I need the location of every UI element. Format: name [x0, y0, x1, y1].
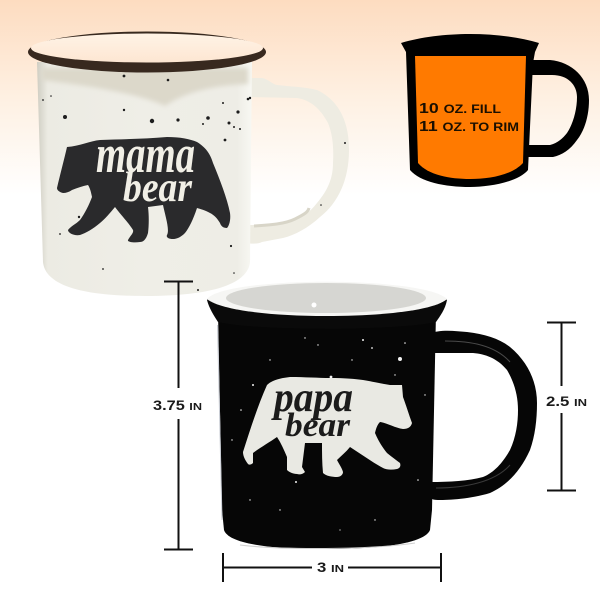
label 2.5 in: 2.5 IN — [546, 394, 587, 409]
white bear silhouette — [243, 377, 412, 477]
mug body — [218, 312, 436, 549]
black bear silhouette — [57, 137, 230, 242]
dimension: height 2.5 in — [546, 322, 587, 490]
white mama bear mug — [28, 32, 349, 296]
background gradient — [0, 0, 600, 195]
papa bear lettering: papa — [271, 375, 353, 421]
mama bear lettering: mama — [96, 124, 195, 184]
papa bear lettering — [271, 375, 353, 444]
body top shadow — [41, 68, 248, 106]
capacity mug icon — [401, 34, 589, 187]
speckles — [231, 337, 426, 531]
icon mug body — [401, 34, 539, 187]
dimension: height 3.75 in — [153, 281, 202, 550]
black papa bear mug — [207, 282, 537, 549]
icon handle — [525, 60, 589, 157]
mug handle — [426, 331, 537, 500]
capacity text: 10 OZ. FILL — [419, 100, 501, 117]
icon orange fill — [415, 56, 526, 179]
mug body — [37, 62, 252, 296]
dimension: width 3 in — [223, 553, 441, 582]
mug rim — [207, 284, 447, 329]
capacity text: 11 OZ. TO RIM — [419, 118, 519, 135]
label 3 in: 3 IN — [317, 560, 344, 575]
mug handle — [246, 78, 349, 244]
mama bear lettering: bear — [123, 165, 193, 211]
mama bear lettering — [96, 124, 195, 211]
mug rim — [28, 32, 266, 72]
label 3.75 in: 3.75 IN — [153, 398, 202, 413]
speckles — [42, 75, 346, 291]
mug interior — [226, 283, 426, 313]
capacity text — [419, 100, 519, 135]
papa bear lettering: bear — [285, 407, 351, 444]
